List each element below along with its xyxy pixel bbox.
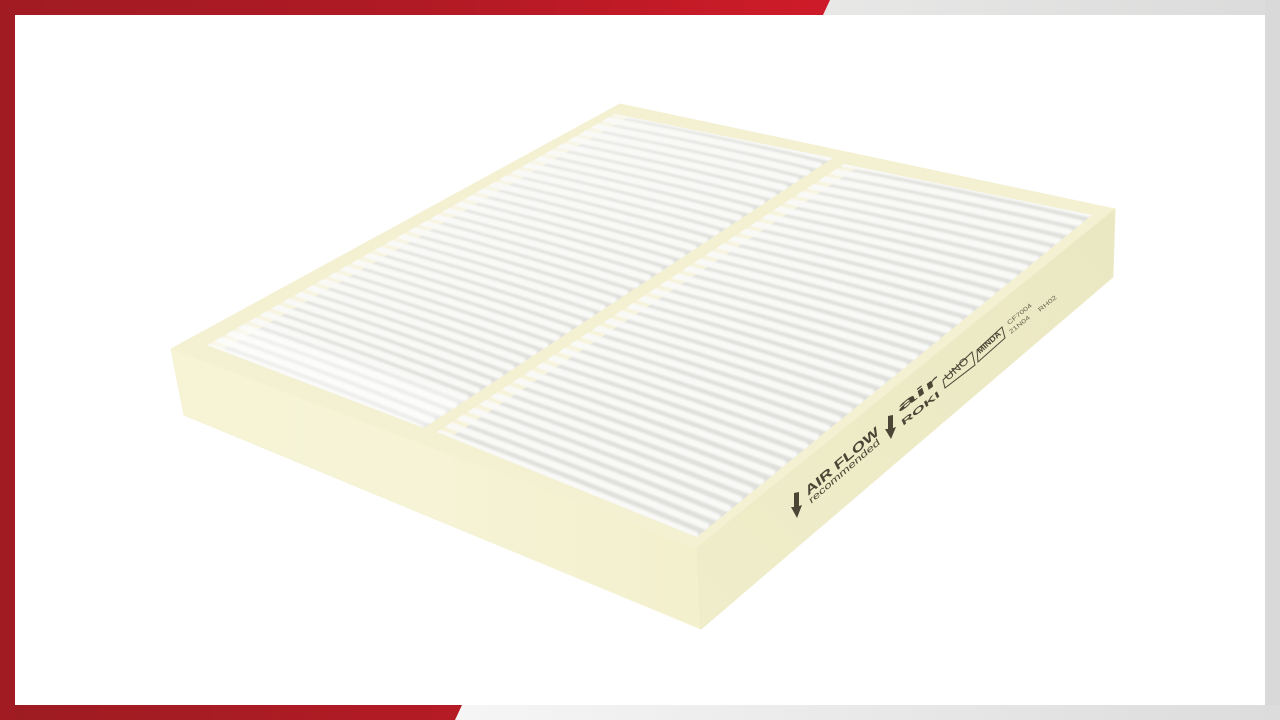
product: pleated cabin air filter — [171, 104, 1115, 629]
filter media: right panel — [437, 164, 1092, 537]
label: part codes: RH02 — [1037, 294, 1059, 314]
label: part codes: 21N04 — [1008, 315, 1032, 336]
logo: air roki: ROKI — [900, 389, 941, 428]
label: air flow: recommended — [807, 436, 881, 506]
top bar red section — [0, 0, 830, 15]
icon: air flow arrow left — [791, 492, 802, 518]
logo: air roki — [896, 371, 942, 428]
filter media: left panel — [205, 113, 833, 428]
right bar — [1265, 0, 1280, 720]
foam frame right face — [697, 209, 1115, 629]
label: part codes: CF7004 — [1006, 302, 1034, 327]
bottom bar gray section — [440, 705, 1280, 720]
logo: uno: UNO — [943, 355, 972, 383]
foam frame front face — [171, 349, 701, 629]
left bar — [0, 0, 15, 720]
label: air flow: AIR FLOW — [803, 423, 882, 499]
logo: uno — [943, 352, 975, 388]
label: air flow — [803, 423, 882, 506]
bottom bar red section — [0, 705, 462, 720]
foam frame top rim — [171, 104, 1115, 548]
logo: air roki: air — [896, 371, 942, 416]
icon: air flow arrow right — [885, 415, 896, 439]
logo: minda — [975, 327, 1005, 362]
label: part codes — [1006, 294, 1059, 336]
logo: minda: MINDA — [975, 329, 1003, 355]
top bar gray section — [780, 0, 1280, 15]
